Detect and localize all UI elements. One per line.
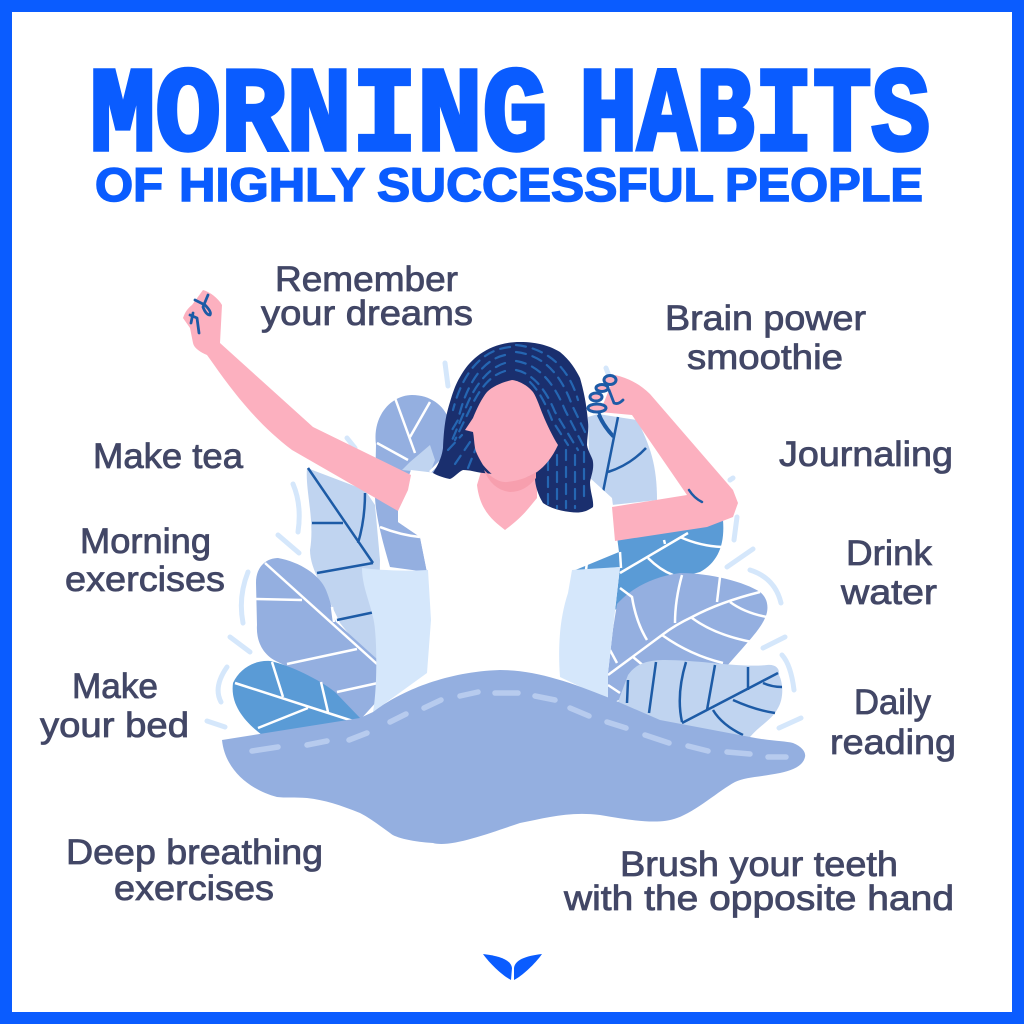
right arm [588, 375, 738, 541]
label: morning exercises [65, 522, 225, 599]
neck [477, 465, 537, 530]
subtitle [95, 158, 923, 211]
blanket stitching [252, 692, 786, 757]
label: brain power smoothie [665, 299, 866, 377]
title: HABITS [579, 50, 930, 186]
left sleeve [362, 568, 431, 712]
label: remember your dreams: Remember [275, 260, 458, 299]
leaf fragment beside shirt [573, 552, 621, 571]
title [90, 50, 930, 186]
label: brush your teeth with the opposite hand: with the opposite hand [563, 879, 954, 918]
hair strands [448, 345, 585, 508]
left fingers [190, 295, 210, 333]
motion marks [207, 363, 801, 728]
label: journaling: Journaling [779, 435, 953, 474]
left arm [183, 290, 411, 511]
leaf: left middle medium [256, 558, 378, 720]
label: remember your dreams [261, 260, 473, 333]
subtitle: PEOPLE [725, 158, 923, 211]
label: make your bed: your bed [40, 706, 189, 745]
right sleeve [559, 567, 620, 700]
label: daily reading [830, 683, 956, 762]
face [465, 380, 558, 482]
label: make your bed [40, 667, 189, 745]
leaf: bottom right pale with dark veins [618, 660, 782, 737]
shirt [398, 470, 620, 700]
label: daily reading: Daily [854, 683, 931, 722]
label: make your bed: Make [72, 667, 158, 706]
label: drink water: water [840, 573, 937, 612]
subtitle: OF [95, 158, 163, 211]
label: brush your teeth with the opposite hand [563, 845, 954, 918]
subtitle: HIGHLY [179, 158, 365, 211]
label: deep breathing exercises: exercises [114, 869, 274, 908]
illustration: woman stretching in bed [183, 290, 805, 844]
leaf: left pale with dark veins [307, 468, 380, 670]
leaf: right blue [612, 520, 723, 610]
hair [433, 342, 593, 512]
leaf: front left blue [233, 661, 362, 735]
left fist [183, 290, 222, 356]
icon: logo wings [483, 954, 542, 980]
label: brush your teeth with the opposite hand: Brush your teeth [620, 845, 898, 884]
label: morning exercises: Morning [80, 522, 211, 561]
leaf: upper left medium [375, 395, 449, 572]
subtitle: SUCCESSFUL [377, 158, 714, 211]
title: MORNING [90, 50, 548, 186]
elbow crease [689, 490, 702, 502]
leaf: right big medium [608, 573, 767, 705]
label: daily reading: reading [830, 723, 956, 762]
label: remember your dreams: your dreams [261, 294, 473, 333]
label: deep breathing exercises: Deep breathing [66, 833, 323, 872]
label: drink water: Drink [846, 534, 933, 573]
label: brain power smoothie: smoothie [687, 338, 843, 377]
label: brain power smoothie: Brain power [665, 299, 866, 338]
label: make tea: Make tea [93, 437, 244, 476]
right fingers [588, 376, 616, 412]
label: deep breathing exercises [66, 833, 323, 908]
label: drink water [840, 534, 937, 612]
blanket [222, 670, 805, 844]
neck shadow [484, 470, 536, 492]
leaf: upper right pale [588, 414, 657, 505]
label: morning exercises: exercises [65, 560, 225, 599]
